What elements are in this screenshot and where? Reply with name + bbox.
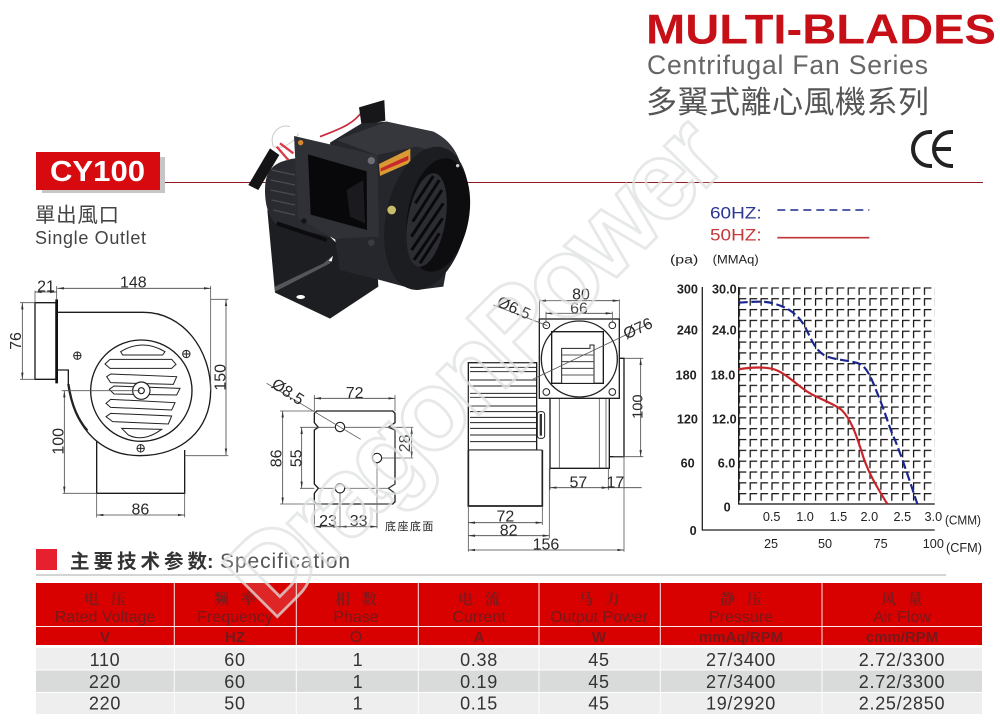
header: frequency: 频 率 <box>214 590 257 608</box>
extension lines <box>468 299 650 552</box>
row: 220V 60Hz: 60 <box>224 672 246 692</box>
header: frequency <box>197 590 273 646</box>
scroll body <box>550 398 609 468</box>
header: pressure: Pressure <box>709 609 773 626</box>
mmaq axis labels: 24.0 <box>712 324 737 338</box>
warning label <box>379 149 410 176</box>
header: current <box>452 590 506 646</box>
dimension labels: 23 <box>319 513 337 530</box>
heading marker <box>36 549 57 570</box>
table rows background <box>36 648 982 714</box>
axis units: (pa) <box>670 252 698 266</box>
header: phase: ⊙ <box>348 629 364 646</box>
model rule line <box>165 182 983 184</box>
header: voltage: 电 压 <box>84 591 126 608</box>
pa axis labels: 180 <box>676 368 697 382</box>
row: 110V 60Hz: 1 <box>353 650 363 670</box>
row: 220V 50Hz: 19/2920 <box>706 694 776 714</box>
curve: 50HZ <box>739 368 887 504</box>
performance chart <box>670 203 982 555</box>
title: MULTI-BLADES: MULTI-BLADES <box>646 6 996 52</box>
row: 110V 60Hz: 45 <box>588 650 610 670</box>
specification table <box>36 583 982 714</box>
header: voltage: Rated Voltage <box>55 609 155 626</box>
extension lines <box>20 286 228 517</box>
row: 110V 60Hz: 0.38 <box>460 650 498 670</box>
curve: 60HZ <box>739 302 917 504</box>
wires <box>272 126 298 147</box>
capacitor <box>537 412 545 438</box>
row: 220V 50Hz: 50 <box>224 694 246 714</box>
model badge: CY100: CY100 <box>50 156 145 188</box>
icon: CE mark <box>913 132 953 166</box>
specification heading: : <box>207 551 214 573</box>
pa axis labels <box>676 283 698 538</box>
header: voltage <box>55 591 155 646</box>
dimension labels: 55 <box>289 449 306 467</box>
cmm axis labels: 1.5 <box>830 510 847 524</box>
table header background <box>36 583 982 645</box>
cfm axis labels: 75 <box>874 537 888 551</box>
specification heading: Specification <box>220 550 350 573</box>
legend: 50HZ: 50HZ: <box>710 226 762 245</box>
dimension labels: 72 <box>346 385 364 402</box>
mmaq axis labels: 12.0 <box>712 412 737 426</box>
extension lines <box>267 383 413 528</box>
specification heading <box>36 549 350 573</box>
connector box <box>359 100 385 126</box>
mmaq axis labels: 30.0 <box>712 283 737 297</box>
cfm axis labels: (CFM) <box>946 541 982 555</box>
mounting holes <box>335 422 382 493</box>
header: pressure: mmAq/RPM <box>699 629 783 646</box>
row: 220V 50Hz: 1 <box>353 694 363 714</box>
row: 220V 60Hz: 27/3400 <box>706 672 776 692</box>
subtitle: Centrifugal Fan Series: Centrifugal Fan Series <box>647 50 928 80</box>
mmaq axis labels <box>711 283 737 515</box>
dimension labels: 86 <box>131 501 149 518</box>
mmaq axis labels: 6.0 <box>718 456 735 470</box>
row: 220V 50Hz <box>89 694 945 714</box>
dimensions <box>314 397 395 400</box>
dimension labels <box>8 274 229 518</box>
row: 220V 50Hz: 220 <box>89 694 121 714</box>
outlet flange <box>294 136 379 239</box>
inlet grille <box>411 176 443 263</box>
base plate dimension drawing <box>267 376 433 533</box>
screws <box>74 350 190 452</box>
axis units: (MMAq) <box>713 252 759 266</box>
header: frequency: HZ <box>225 629 245 646</box>
row: 220V 60Hz <box>89 672 945 692</box>
dimension labels: 66 <box>570 300 588 317</box>
dimension labels: 100 <box>51 428 68 455</box>
header: pressure: 静 压 <box>720 590 762 608</box>
row: 110V 60Hz: 110 <box>90 650 120 670</box>
outlet opening <box>552 332 603 383</box>
header: pressure <box>699 590 783 646</box>
row: 110V 60Hz: 60 <box>224 650 246 670</box>
dimension labels: 156 <box>533 536 559 553</box>
mmaq axis labels: 0 <box>724 501 731 515</box>
chart grid <box>739 287 935 504</box>
dimension labels: Ø8.5 <box>268 376 307 409</box>
cfm axis labels: 100 <box>923 537 944 551</box>
chart axes <box>702 287 935 530</box>
legend: 60HZ: 60HZ: <box>710 203 762 222</box>
cfm axis labels: 50 <box>818 537 832 551</box>
mmaq axis labels: 18.0 <box>711 368 735 382</box>
dimension labels: 72 <box>496 509 514 526</box>
heading text: 主要技术参数 <box>70 550 207 573</box>
header: air flow: cmm/RPM <box>866 629 938 646</box>
lower motor box <box>468 450 542 506</box>
row: 220V 60Hz: 45 <box>588 672 610 692</box>
cmm axis labels: 2.0 <box>861 510 878 524</box>
model description: Single Outlet <box>35 228 146 248</box>
dimension labels <box>268 376 433 533</box>
motor fins <box>468 363 537 450</box>
subtitle: Chinese: 多翼式離心風機系列 <box>646 85 929 120</box>
cfm axis labels <box>764 537 982 555</box>
pa axis labels: 300 <box>677 283 698 297</box>
title block <box>646 6 996 120</box>
model description <box>35 204 146 248</box>
row: 220V 50Hz: 0.15 <box>460 694 498 714</box>
row: 220V 50Hz: 2.25/2850 <box>859 694 945 714</box>
header: phase: 相 数 <box>335 590 377 608</box>
pa axis labels: 0 <box>690 524 697 538</box>
base bracket <box>267 210 378 319</box>
header: current: Current <box>452 609 506 626</box>
header: voltage: V <box>100 629 110 646</box>
product photo: blower fan <box>248 100 482 319</box>
row: 220V 60Hz: 220 <box>89 672 121 692</box>
pa axis labels: 240 <box>677 324 698 338</box>
row: 220V 60Hz: 1 <box>353 672 363 692</box>
dimension labels: 80 <box>572 286 590 303</box>
inlet circle and grille <box>91 340 192 441</box>
dimension labels: 28 <box>397 434 414 452</box>
base foot <box>97 442 185 493</box>
dimension labels: 33 <box>350 513 368 530</box>
header: current: 电 流 <box>458 590 501 608</box>
dimension labels: 100 <box>631 394 647 419</box>
plate outline <box>314 411 395 504</box>
scroll housing <box>330 122 463 290</box>
inlet ring <box>372 139 482 298</box>
pa axis labels: 120 <box>677 412 698 426</box>
row: 220V 50Hz: 45 <box>588 694 610 714</box>
dimension labels: 148 <box>120 274 147 291</box>
row: 220V 60Hz: 2.72/3300 <box>859 672 945 692</box>
dimension labels: 17 <box>606 474 624 491</box>
watermark: DragonPower: DragonPower <box>201 91 749 639</box>
cmm axis labels: 3.0 <box>925 510 942 524</box>
model badge: CY100 <box>36 152 165 193</box>
header: frequency: Frequency <box>197 609 273 626</box>
header: phase: Phase <box>333 609 379 626</box>
row: 110V 60Hz <box>90 650 945 670</box>
outlet and flange <box>35 303 56 379</box>
dimensions <box>57 287 211 290</box>
cmm axis labels: (CMM) <box>945 513 981 527</box>
axis units <box>670 252 759 266</box>
dimension labels: Ø76 <box>621 315 656 343</box>
pa axis labels: 60 <box>681 456 695 470</box>
dimension labels: Ø6.5 <box>494 294 533 323</box>
cfm axis labels: 25 <box>764 537 778 551</box>
side view dimension drawing <box>8 274 229 518</box>
cmm axis labels: 0.5 <box>763 510 780 524</box>
cmm axis labels <box>763 510 981 527</box>
dimension labels: 86 <box>268 449 285 467</box>
header: current: A <box>474 629 485 646</box>
dimension labels: 57 <box>569 474 587 491</box>
model description: 單出風口 <box>35 204 119 227</box>
scroll casing <box>57 312 211 456</box>
row: 110V 60Hz: 27/3400 <box>706 650 776 670</box>
header: output power: Output Power <box>550 609 649 626</box>
square flange <box>539 319 619 398</box>
motor body <box>265 158 330 237</box>
header: output power: 马 力 <box>578 590 620 608</box>
header: air flow <box>866 591 938 646</box>
dimension labels <box>494 286 656 553</box>
dimension labels: 21 <box>37 278 55 295</box>
hub <box>133 382 150 399</box>
dimension labels: 82 <box>500 523 518 540</box>
dimension labels: 76 <box>8 332 25 350</box>
front view dimension drawing <box>468 286 656 553</box>
cmm axis labels: 1.0 <box>796 510 814 524</box>
dimension labels: 150 <box>212 364 229 391</box>
header: phase <box>333 590 379 646</box>
dimension labels: 底座底面 <box>385 519 433 533</box>
header: air flow: Air Flow <box>873 609 931 626</box>
cmm axis labels: 2.5 <box>894 510 911 524</box>
header: air flow: 风 量 <box>881 591 923 608</box>
row: 220V 60Hz: 0.19 <box>460 672 498 692</box>
row: 110V 60Hz: 2.72/3300 <box>859 650 945 670</box>
header: output power: W <box>592 629 607 646</box>
header: output power <box>550 590 649 646</box>
dimensions <box>539 299 619 302</box>
